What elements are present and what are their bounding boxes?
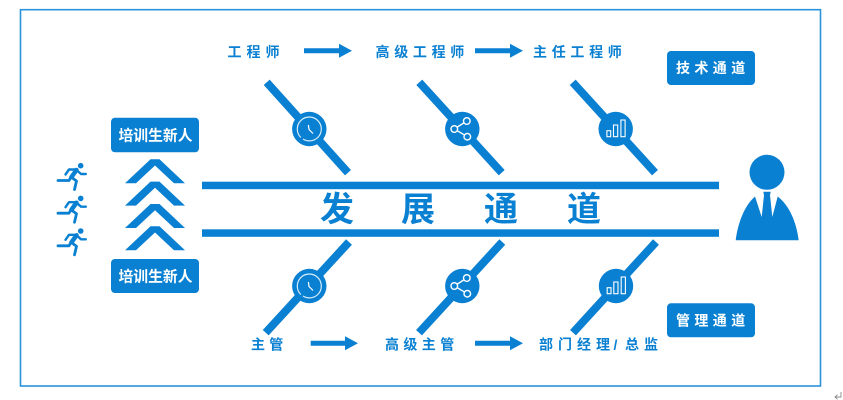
upper bone: clock [267,82,348,173]
arrow: senior supervisor to manager [475,336,523,350]
spine: lower bar [202,229,719,237]
lower bone: share [419,242,502,333]
badge: trainee top: 培训生新人 [118,126,193,144]
management track career path [251,336,658,352]
lower bone: bar chart [573,242,656,333]
arrow: engineer to senior engineer [304,44,352,58]
badge: management track: 管理通道 [676,312,750,328]
upper bone: bar chart [573,82,655,173]
icon: return mark [835,392,841,399]
label: department manager / director: 部门经理/总监 [539,336,658,352]
icon: runner 2 [58,196,86,222]
upper bone: share [419,82,502,173]
icon: runner 3 [58,228,86,255]
arrow: supervisor to senior supervisor [311,336,358,350]
label: senior supervisor: 高级主管 [385,336,459,352]
arrow: senior engineer to chief engineer [475,44,523,58]
label: supervisor: 主管 [251,336,287,352]
badge: management track [667,303,755,337]
upward chevrons [125,159,185,250]
icon: runners [58,163,86,255]
badge: technical track: 技术通道 [676,60,750,76]
label: chief engineer: 主任工程师 [533,44,626,60]
technical track career path [228,44,626,60]
icon: person in suit [736,155,799,240]
label: engineer: 工程师 [228,44,284,60]
title: 发展通道 [320,191,601,229]
badge: trainee bottom [111,259,199,293]
icon: runner 1 [58,163,86,190]
badge: trainee top [111,118,199,152]
badge: technical track [667,51,755,85]
lower bone: clock [266,242,349,333]
badge: trainee bottom: 培训生新人 [118,267,193,285]
spine: upper bar [202,182,719,189]
label: senior engineer: 高级工程师 [376,44,469,60]
